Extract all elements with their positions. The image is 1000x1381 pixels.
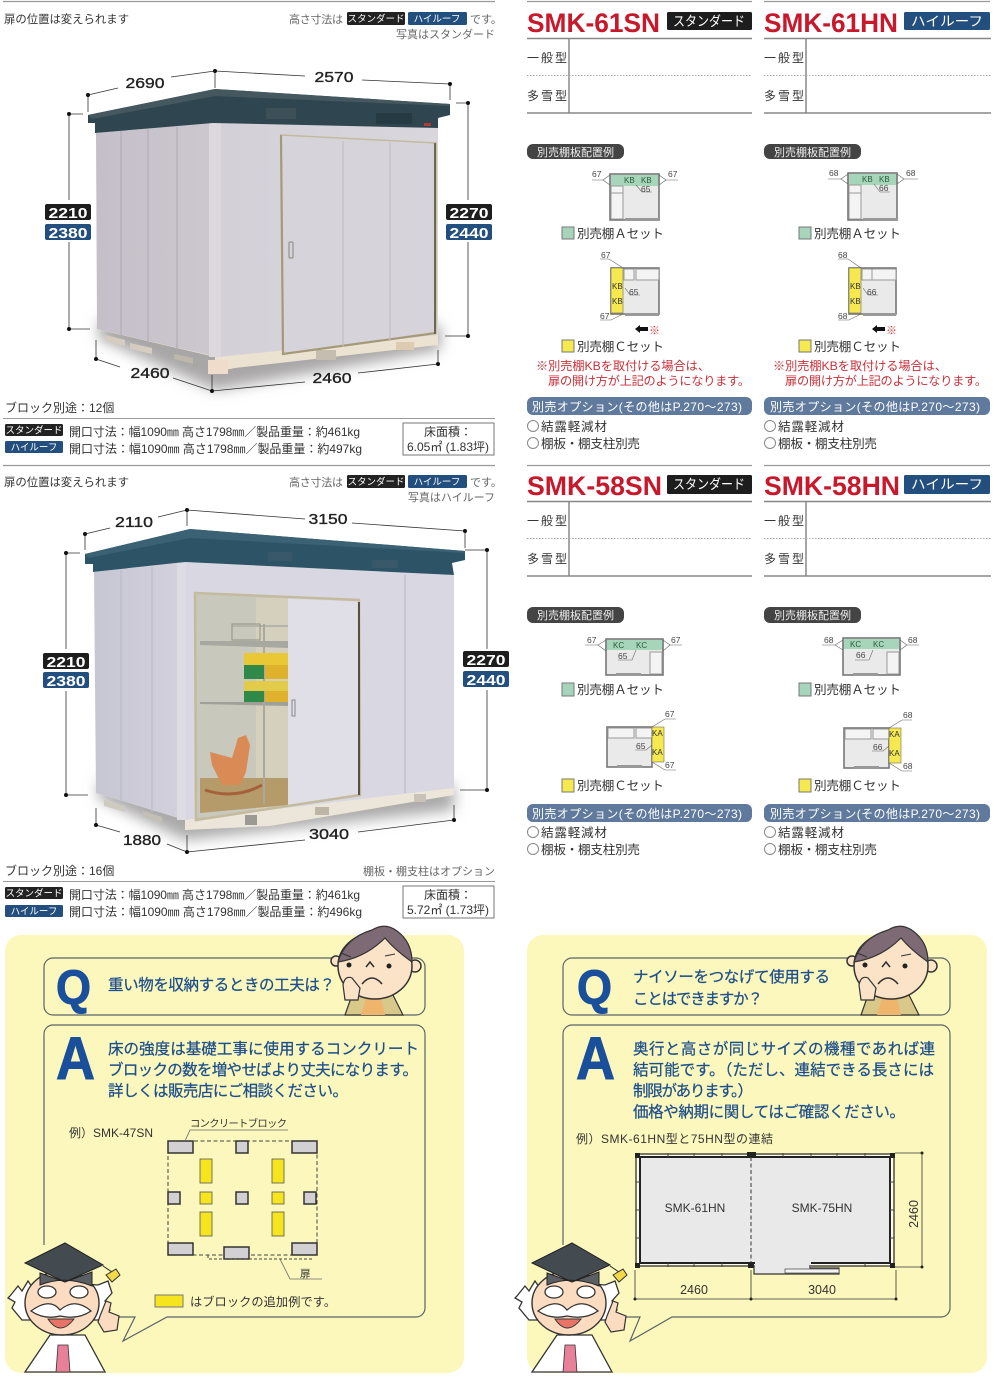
legend C: 別売棚Ｃセット [577,778,664,793]
note: height legend: スタンダード [347,13,405,25]
plan A: 67 [668,169,678,179]
plan C: 66 [867,287,877,297]
options pill: 別売オプション(その他はP.270〜273) [770,399,980,414]
height badges left: 2380 [46,673,86,690]
spec rows: スタンダード [5,888,63,900]
height badges left [43,653,89,690]
plan dimensions: 3040 [808,1283,836,1297]
plan A [592,169,678,221]
plan dimensions: 2460 [907,1200,921,1228]
type table: 一般型 [764,51,804,65]
plan A: 67 [587,635,597,645]
dimension lines: 1880 [123,832,161,849]
plan C: KB [612,282,623,291]
type table [527,38,752,113]
plan C: KA [652,748,663,757]
type table [764,501,991,576]
height badges right: 2440 [450,225,488,242]
note: height legend: 高さ寸法は [289,475,343,489]
height badges right [463,651,509,689]
plan dimensions: 2460 [680,1283,708,1297]
height badges right: 2440 [466,672,506,689]
arrow and asterisk [635,325,660,337]
block layout diagram [168,1117,322,1280]
divider lines [3,2,990,466]
block layout diagram: コンクリートブロック [190,1117,287,1130]
question box: 重い物を収納するときの工夫は？ [108,976,335,994]
legend C: 別売棚Ｃセット [814,339,901,354]
spec rows: 開口寸法：幅1090㎜ 高さ1798㎜／製品重量：約497kg [69,441,362,456]
type table: 多雪型 [764,89,804,103]
note: height legend: 高さ寸法は [289,12,343,26]
answer box: 奥行と高さが同じサイズの機種であれば連 [633,1040,935,1058]
plan C: 67 [665,760,675,770]
options list: 棚板・棚支柱別売 [541,436,640,451]
floor area box [403,886,494,918]
dimension lines [64,508,489,854]
dimension lines: 2460 [130,365,170,382]
plan C: KA [889,749,900,758]
character: worried woman [847,926,937,1015]
plan A: 68 [908,635,918,645]
standard tag: スタンダード [673,477,745,492]
options list: 結露軽減材 [541,825,607,840]
floor area box: 6.05㎡ (1.83坪) [407,440,489,454]
plan A: 67 [592,169,602,179]
floor area box [403,423,494,455]
legend A: 別売棚Ａセット [577,682,664,697]
shelf layout pill [764,607,861,623]
note: height legend: 写真はハイルーフ [408,490,495,504]
height badges left: 2210 [46,654,86,671]
answer box: A [56,1025,95,1092]
height badges right: 2270 [450,205,488,222]
shelf layout pill [527,144,624,159]
spec rows: 開口寸法：幅1090㎜ 高さ1798㎜／製品重量：約461kg [69,887,360,902]
spec rows: ハイルーフ [11,442,57,454]
note: height legend: です。 [470,13,502,26]
plan C: 68 [903,761,913,771]
legend A: 別売棚Ａセット [814,226,901,241]
note: height legend: ハイルーフ [414,477,460,488]
question box: Q [577,962,612,1015]
options list: 棚板・棚支柱別売 [778,842,877,857]
plan C: 67 [600,311,610,321]
options list: 棚板・棚支柱別売 [778,436,877,451]
plan C: 67 [665,709,675,719]
plan A [585,635,682,676]
plan C: KB [612,297,623,306]
dimension lines: 2690 [126,75,164,92]
plan C: 68 [838,250,848,260]
question box [563,958,950,1015]
arrow and asterisk [872,325,897,337]
answer box: 制限があります。） [633,1082,753,1100]
arrow and asterisk: ※ [886,325,897,337]
panel: SMK-61HN spec [764,8,991,451]
plan C: 65 [636,741,646,751]
plan C [600,250,659,321]
legend C: 別売棚Ｃセット [814,778,901,793]
high roof tag: ハイルーフ [911,14,983,29]
joined floor plan: SMK-61HN [665,1201,725,1215]
type table [527,501,752,576]
dimension lines: 2570 [314,69,354,86]
plan A: 65 [618,651,628,661]
spec rows: スタンダード [5,424,63,436]
note: height legend [289,12,502,41]
spec rows: 開口寸法：幅1090㎜ 高さ1798㎜／製品重量：約461kg [69,424,360,439]
note: height legend [289,475,502,504]
note: door position: 扉の位置は変えられます [4,476,129,489]
plan A: KB [624,176,635,185]
shed photo: SMK-58 [85,529,465,840]
shelf layout pill [527,607,624,623]
dimension lines: 2110 [115,514,153,531]
answer box [563,1025,950,1341]
joined floor plan: SMK-75HN [792,1201,852,1215]
plan A: KC [636,641,647,650]
type table: 多雪型 [527,89,567,103]
note: height legend: です。 [470,476,502,489]
shelf layout pill: 別売棚板配置例 [774,608,851,622]
question box: ナイソーをつなげて使用する [633,968,830,986]
legend A: 別売棚Ａセット [577,226,664,241]
high roof tag [904,12,990,30]
plan A [822,635,919,676]
plan C [844,710,913,771]
plan A: KC [613,641,624,650]
high roof tag: ハイルーフ [911,477,983,492]
type table: 多雪型 [527,552,567,566]
block legend: はブロックの追加例です。 [190,1294,336,1309]
red note: 扉の開け方が上記のようになります。 [785,373,987,388]
block count: ブロック別途：12個 [5,400,114,415]
legend C: 別売棚Ｃセット [577,339,664,354]
floor area box: 5.72㎡ (1.73坪) [407,903,489,917]
plan C: 68 [838,311,848,321]
standard tag: スタンダード [673,14,745,29]
floor area box: 床面積： [424,424,472,439]
joined floor plan [635,1152,895,1274]
note: door position: 扉の位置は変えられます [4,13,129,26]
answer box: ブロックの数を増やせばより丈夫になります。 [108,1060,418,1079]
shelf layout pill: 別売棚板配置例 [774,145,851,159]
red note: 扉の開け方が上記のようになります。 [548,373,750,388]
height badges left: 2380 [48,225,88,242]
dimension lines [67,69,470,393]
plan A: 68 [824,635,834,645]
shelf option note: 棚板・棚支柱はオプション [363,864,495,878]
options list [528,419,640,451]
panel: SMK-61SN spec [527,8,752,451]
legend A: 別売棚Ａセット [814,682,901,697]
spec rows: ハイルーフ [11,906,57,918]
plan A [828,168,918,221]
plan C: KB [850,282,861,291]
example label: 例）SMK-61HN型と75HN型の連結 [576,1132,773,1146]
interior [195,593,288,820]
options pill: 別売オプション(その他はP.270〜273) [770,806,980,821]
plan A: KC [850,640,861,649]
plan A: 66 [879,183,889,193]
options list [764,419,877,451]
block layout diagram: 扉 [300,1268,310,1280]
character: professor [515,1243,627,1372]
panel: SMK-58 shed [3,475,509,919]
plan C: 66 [873,742,883,752]
question box: Q [56,962,91,1015]
note: height legend: 写真はスタンダード [396,27,495,41]
shelf layout pill: 別売棚板配置例 [537,145,614,159]
answer box [44,1025,425,1341]
plan dimensions [634,1152,924,1300]
dimension lines: 3150 [308,511,348,528]
type table: 一般型 [527,51,567,65]
model heading: SMK-58HN [764,471,900,501]
plan A: 68 [829,168,839,178]
answer box: 価格や納期に関してはご確認ください。 [633,1103,905,1121]
floor area box: 床面積： [424,887,472,902]
model heading: SMK-61SN [527,8,660,38]
note: height legend: スタンダード [347,476,405,488]
panel: SMK-58SN spec [527,471,752,857]
red note [773,358,987,388]
options list: 結露軽減材 [541,419,607,434]
dimension lines: 2460 [312,370,352,387]
block count: ブロック別途：16個 [5,863,114,878]
panel: SMK-58HN spec [764,471,991,857]
answer box: A [576,1025,615,1092]
red note: ※別売棚KBを取付ける場合は、 [536,358,710,373]
example label: 例）SMK-47SN [69,1126,153,1140]
type table [764,38,991,113]
plan C: 67 [601,250,611,260]
plan C: KA [652,729,663,738]
red note [536,358,750,388]
plan C [838,250,896,321]
options list [528,825,640,857]
character: professor [8,1243,120,1372]
plan A: 67 [671,635,681,645]
height badges right: 2270 [466,652,506,669]
height badges left [45,204,91,242]
question box: ことはできますか？ [633,990,763,1008]
plan A: 68 [906,168,916,178]
options list: 結露軽減材 [778,419,844,434]
height badges right [446,204,492,242]
options pill: 別売オプション(その他はP.270〜273) [532,399,742,414]
answer box: 床の強度は基礎工事に使用するコンクリート [108,1040,419,1058]
panel: SMK-61 shed [3,12,502,456]
plan C: KB [850,297,861,306]
arrow and asterisk: ※ [649,325,660,337]
shed photo: SMK-61 [88,89,450,390]
plan A: 65 [641,184,651,194]
character: worried woman [331,926,421,1015]
type table: 一般型 [764,514,804,528]
panel: Q&A connecting sheds [515,926,987,1373]
type table: 一般型 [527,514,567,528]
answer box: 詳しくは販売店にご相談ください。 [108,1082,348,1100]
options list: 棚板・棚支柱別売 [541,842,640,857]
sliding door [288,599,360,806]
shelf layout pill [764,144,861,159]
plan A: KB [879,175,890,184]
options pill: 別売オプション(その他はP.270〜273) [532,806,742,821]
type table: 多雪型 [764,552,804,566]
panel: Q&A heavy storage [5,926,464,1373]
plan C: 68 [903,710,913,720]
model heading: SMK-58SN [527,471,662,501]
note: height legend: ハイルーフ [414,14,460,25]
plan C: KA [889,730,900,739]
answer box: 結可能です。（ただし、連結できる長さには [633,1061,934,1079]
options list [764,825,877,857]
plan A: KB [641,176,652,185]
spec rows: 開口寸法：幅1090㎜ 高さ1798㎜／製品重量：約496kg [69,904,362,919]
height badges left: 2210 [48,205,88,222]
plan C [607,709,676,770]
plan A: KB [862,175,873,184]
spec rows [5,887,362,919]
red note: ※別売棚KBを取付ける場合は、 [773,358,947,373]
question box [44,958,425,1015]
plan C: 65 [629,287,639,297]
high roof tag [904,475,990,494]
dimension lines: 3040 [309,826,349,843]
model heading: SMK-61HN [764,8,898,38]
plan A: KC [873,640,884,649]
shelf layout pill: 別売棚板配置例 [537,608,614,622]
plan A: 66 [856,650,866,660]
spec rows [5,424,362,456]
options list: 結露軽減材 [778,825,844,840]
